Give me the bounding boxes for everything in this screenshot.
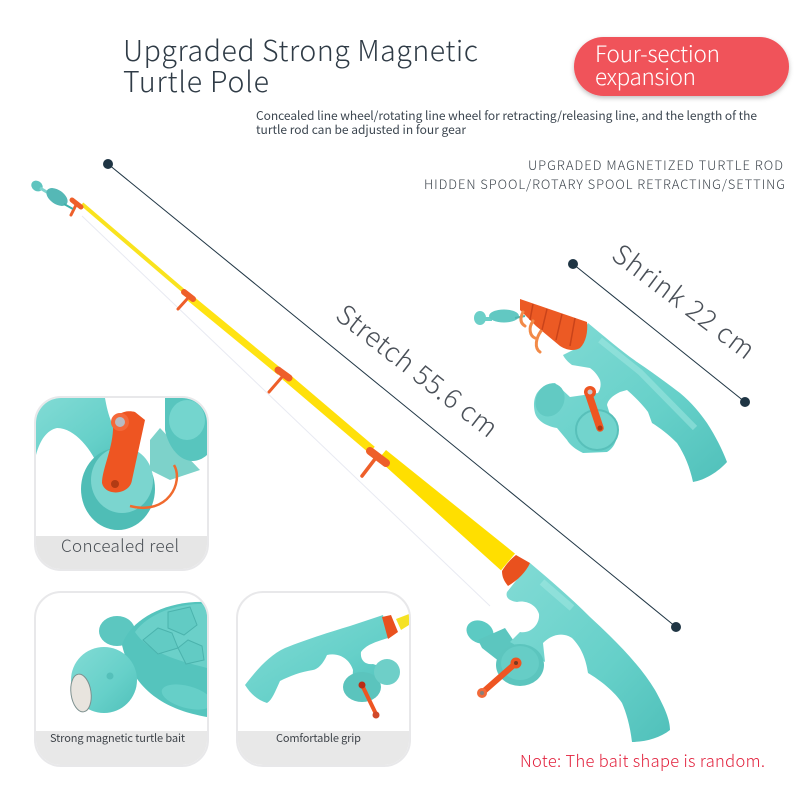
collar: [502, 555, 530, 586]
subtitle text: [424, 155, 785, 193]
reel photo: [36, 398, 207, 530]
subtitle text: HIDDEN SPOOL/ROTARY SPOOL RETRACTING/SETTING: [424, 174, 785, 193]
dimension line: stretch: [103, 159, 681, 632]
turtle photo: [68, 602, 215, 717]
panel: magnetic turtle bait: [30, 592, 215, 771]
extended rod: [29, 178, 670, 742]
line guides: [71, 200, 386, 476]
turtle tip: [29, 178, 73, 210]
subtitle text: UPGRADED MAGNETIZED TURTLE ROD: [528, 155, 783, 174]
panel: concealed reel: Concealed reel: [61, 532, 179, 557]
description text: turtle rod can be adjusted in four gear: [256, 121, 466, 138]
handle body: [534, 323, 727, 482]
compact rod: [474, 299, 727, 482]
fishing line: [82, 216, 490, 606]
dimension label: shrink: Shrink 22 cm: [605, 233, 764, 367]
badge: four-section expansion: [574, 37, 789, 96]
panel: comfortable grip: [232, 592, 414, 771]
panel: concealed reel: [30, 397, 212, 576]
crank: [483, 663, 516, 692]
turtle bait: [474, 310, 525, 325]
rod sections: [82, 204, 515, 570]
title: Turtle Pole: [123, 60, 269, 101]
dimension label: stretch: Stretch 55.6 cm: [329, 294, 508, 445]
badge: four-section expansion: Four-section: [595, 37, 720, 69]
orange collapsed sections: [520, 299, 587, 352]
title: Upgraded Strong Magnetic: [123, 29, 478, 70]
description text: Concealed line wheel/rotating line wheel for retracting/releasing line, and the length of the: [256, 107, 757, 124]
note: Note: The bait shape is random.: [520, 748, 765, 772]
title: [123, 29, 478, 101]
panel: magnetic turtle bait: Strong magnetic turtle bait: [50, 730, 185, 746]
dimension line: shrink: [568, 259, 750, 407]
badge: four-section expansion: expansion: [595, 60, 696, 92]
handle: [463, 555, 670, 742]
grip photo: [245, 614, 409, 718]
panel: comfortable grip: Comfortable grip: [276, 730, 361, 746]
crank: [584, 386, 602, 430]
description text: [256, 107, 757, 138]
